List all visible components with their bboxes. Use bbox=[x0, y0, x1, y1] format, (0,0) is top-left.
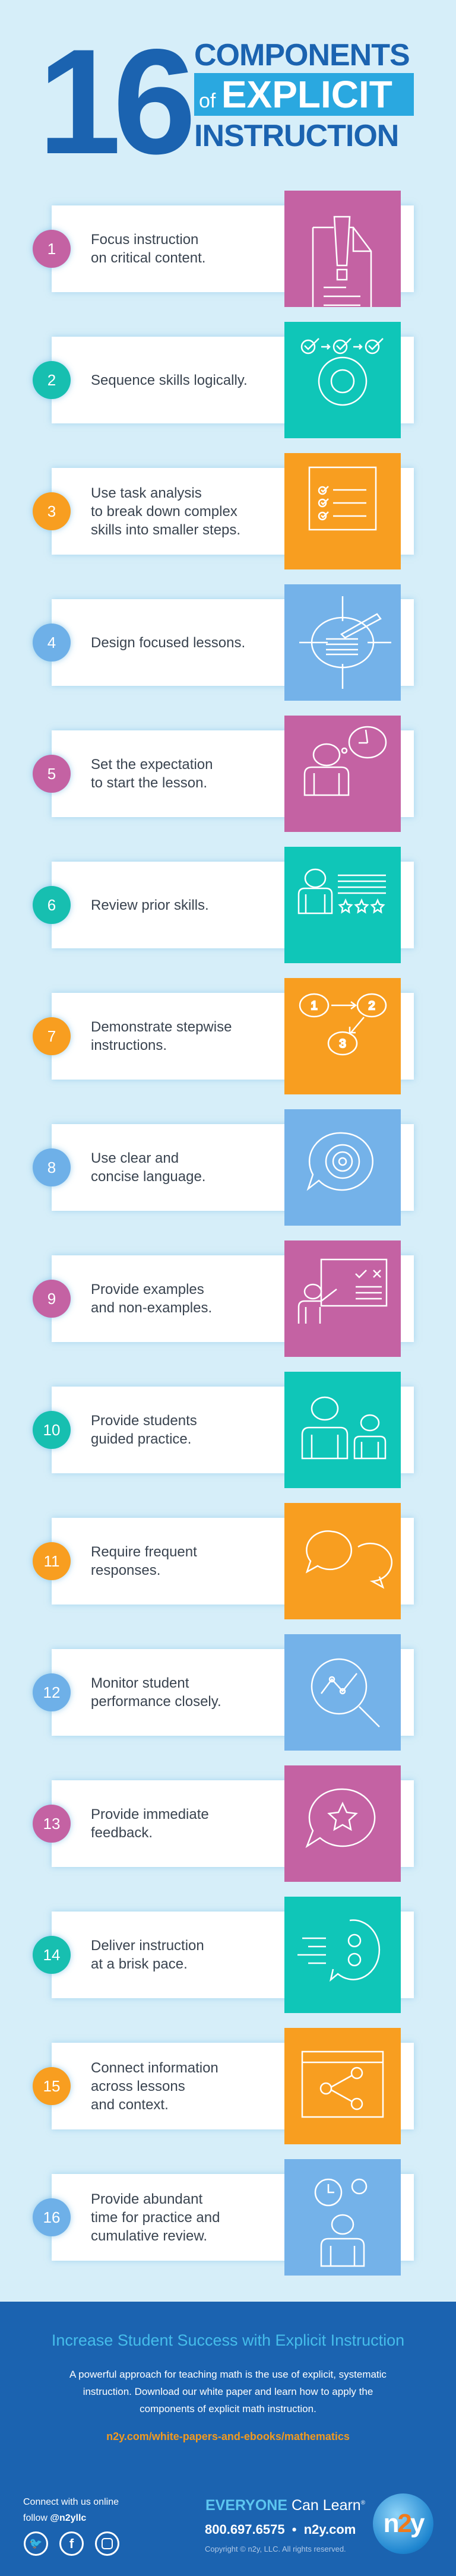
icon: teacher at board bbox=[284, 1240, 401, 1357]
icon: checks and gear bbox=[284, 322, 401, 438]
item 8 bbox=[30, 1109, 417, 1226]
copyright: Copyright © n2y, LLC. All rights reserved. bbox=[205, 2545, 346, 2553]
item 10 bbox=[30, 1372, 417, 1488]
number badge 8: 8 bbox=[48, 1158, 56, 1176]
logo n2y: n y bbox=[384, 2509, 423, 2538]
text 8: Use clear and bbox=[91, 1150, 179, 1166]
text 14 bbox=[91, 1938, 204, 1972]
text 6: Review prior skills. bbox=[91, 897, 209, 913]
social icons: 🐦 bbox=[29, 2537, 43, 2549]
number badge 1: 1 bbox=[48, 240, 56, 258]
item 5 bbox=[30, 716, 417, 832]
text 1: on critical content. bbox=[91, 250, 205, 266]
item 2 bbox=[30, 322, 417, 438]
number badge 9: 9 bbox=[48, 1290, 56, 1308]
number badge 4: 4 bbox=[48, 633, 56, 651]
text 16: cumulative review. bbox=[91, 2228, 207, 2243]
icon: browser share bbox=[284, 2028, 401, 2144]
number badge 16: 16 bbox=[43, 2208, 60, 2226]
text 15: and context. bbox=[91, 2096, 169, 2113]
number badge 5: 5 bbox=[48, 765, 56, 783]
number badge 2 bbox=[33, 361, 71, 399]
tagline: EVERYONE Can Learn® bbox=[205, 2497, 365, 2514]
heading text COMPONENTS: COMPONENTS bbox=[194, 38, 410, 72]
text 16: time for practice and bbox=[91, 2209, 220, 2226]
phone and url: 800.697.6575 • n2y.com bbox=[205, 2522, 356, 2537]
number badge 15 bbox=[33, 2067, 71, 2105]
text 5 bbox=[91, 757, 213, 791]
text 14: Deliver instruction bbox=[91, 1938, 204, 1954]
icon: person with stars bbox=[284, 847, 401, 963]
text 5: to start the lesson. bbox=[91, 775, 207, 791]
number badge 11 bbox=[33, 1542, 71, 1580]
footer link: n2y.com/white-papers-and-ebooks/mathematics bbox=[106, 2431, 350, 2442]
item 15 bbox=[30, 2028, 417, 2144]
heading text INSTRUCTION: INSTRUCTION bbox=[194, 119, 398, 153]
social text bbox=[23, 2497, 119, 2523]
number badge 14: 14 bbox=[43, 1945, 60, 1963]
text 2: Sequence skills logically. bbox=[91, 372, 248, 388]
text 1 bbox=[91, 232, 205, 266]
number badge 3 bbox=[33, 492, 71, 530]
text 10: guided practice. bbox=[91, 1431, 191, 1447]
footer heading: Increase Student Success with Explicit Instruction bbox=[52, 2331, 404, 2349]
item 6 bbox=[30, 847, 417, 963]
item 9 bbox=[30, 1240, 417, 1357]
text 3: Use task analysis bbox=[91, 485, 202, 501]
icon: star bubble bbox=[284, 1765, 401, 1882]
number badge 14 bbox=[33, 1936, 71, 1974]
social icons bbox=[24, 2531, 119, 2556]
number badge 9 bbox=[33, 1280, 71, 1318]
text 7 bbox=[91, 1019, 232, 1053]
icon: fast bubble bbox=[284, 1897, 401, 2013]
text 9: and non-examples. bbox=[91, 1300, 212, 1316]
number badge 1 bbox=[33, 230, 71, 268]
text 9: Provide examples bbox=[91, 1281, 204, 1298]
icon: checklist bbox=[284, 453, 401, 569]
icon: two people bbox=[284, 1372, 401, 1488]
heading box of EXPLICIT: of EXPLICIT bbox=[199, 73, 392, 116]
text 7: Demonstrate stepwise bbox=[91, 1019, 232, 1035]
text 15: across lessons bbox=[91, 2078, 185, 2094]
number badge 6 bbox=[33, 886, 71, 924]
text 13 bbox=[91, 1806, 209, 1841]
text 15: Connect information bbox=[91, 2059, 218, 2076]
number badge 13: 13 bbox=[43, 1815, 60, 1833]
item 12 bbox=[30, 1634, 417, 1751]
item 14 bbox=[30, 1897, 417, 2013]
icon: numbered steps: 1 bbox=[311, 999, 318, 1012]
text 5: Set the expectation bbox=[91, 757, 213, 773]
social icons: f bbox=[69, 2536, 74, 2551]
text 11 bbox=[91, 1544, 197, 1578]
text 13: feedback. bbox=[91, 1825, 153, 1841]
number badge 8 bbox=[33, 1148, 71, 1186]
icon: numbered steps: 2 bbox=[368, 999, 375, 1012]
text 16 bbox=[91, 2191, 220, 2243]
item 13 bbox=[30, 1765, 417, 1882]
social text: Connect with us online bbox=[23, 2497, 119, 2507]
text 3: skills into smaller steps. bbox=[91, 521, 240, 538]
footer panel bbox=[0, 2302, 456, 2576]
logo n2y bbox=[373, 2493, 433, 2554]
number badge 3: 3 bbox=[48, 502, 56, 520]
number badge 4 bbox=[33, 624, 71, 662]
number badge 15: 15 bbox=[43, 2077, 60, 2095]
number badge 10 bbox=[33, 1411, 71, 1449]
number badge 7 bbox=[33, 1017, 71, 1055]
text 7: instructions. bbox=[91, 1037, 167, 1053]
text 11: Require frequent bbox=[91, 1544, 197, 1560]
text 13: Provide immediate bbox=[91, 1806, 209, 1822]
text 10 bbox=[91, 1413, 197, 1447]
big number 16: 16 bbox=[38, 18, 188, 185]
number badge 5 bbox=[33, 755, 71, 793]
item 11 bbox=[30, 1503, 417, 1619]
icon: speech bubbles bbox=[284, 1503, 401, 1619]
text 4: Design focused lessons. bbox=[91, 634, 245, 651]
text 8: concise language. bbox=[91, 1169, 205, 1185]
icon: magnifier chart bbox=[284, 1634, 401, 1751]
number badge 11: 11 bbox=[44, 1552, 59, 1570]
number badge 13 bbox=[33, 1805, 71, 1843]
icon: numbered steps bbox=[284, 978, 401, 1094]
item 7 bbox=[30, 978, 417, 1094]
social text: follow @n2yllc bbox=[23, 2513, 86, 2523]
text 11: responses. bbox=[91, 1562, 160, 1578]
footer paragraph: A powerful approach for teaching math is the use of explicit, systematic instruction. Download our white paper and learn how to apply the components of explicit math instruction. bbox=[69, 2369, 387, 2414]
icon: target with pencil bbox=[284, 584, 401, 701]
text 10: Provide students bbox=[91, 1413, 197, 1429]
text 12: performance closely. bbox=[91, 1694, 221, 1710]
item 1 bbox=[30, 191, 417, 307]
number badge 12 bbox=[33, 1673, 71, 1711]
text 14: at a brisk pace. bbox=[91, 1956, 188, 1972]
title bbox=[38, 18, 414, 185]
icon: person with clock and gear bbox=[284, 2159, 401, 2276]
text 3: to break down complex bbox=[91, 504, 238, 519]
icon: person with clock bbox=[284, 716, 401, 832]
icon: numbered steps: 3 bbox=[339, 1037, 346, 1050]
logo n2y: 2 bbox=[397, 2509, 410, 2538]
text 9 bbox=[91, 1281, 212, 1316]
number badge 7: 7 bbox=[48, 1027, 56, 1045]
text 1: Focus instruction bbox=[91, 232, 198, 248]
item 16 bbox=[30, 2159, 417, 2276]
item 4 bbox=[30, 584, 417, 701]
number badge 2: 2 bbox=[48, 371, 56, 388]
text 8 bbox=[91, 1150, 205, 1185]
text 12: Monitor student bbox=[91, 1675, 189, 1691]
number badge 10: 10 bbox=[43, 1420, 60, 1438]
icon: document with exclamation bbox=[284, 191, 401, 307]
text 16: Provide abundant bbox=[91, 2191, 202, 2207]
number badge 12: 12 bbox=[43, 1683, 60, 1701]
number badge 6: 6 bbox=[48, 895, 56, 913]
text 12 bbox=[91, 1675, 221, 1710]
number badge 16 bbox=[33, 2198, 71, 2236]
item 3 bbox=[30, 453, 417, 569]
icon: speech bubble target bbox=[284, 1109, 401, 1226]
text 3 bbox=[91, 485, 240, 538]
text 15 bbox=[91, 2059, 218, 2113]
